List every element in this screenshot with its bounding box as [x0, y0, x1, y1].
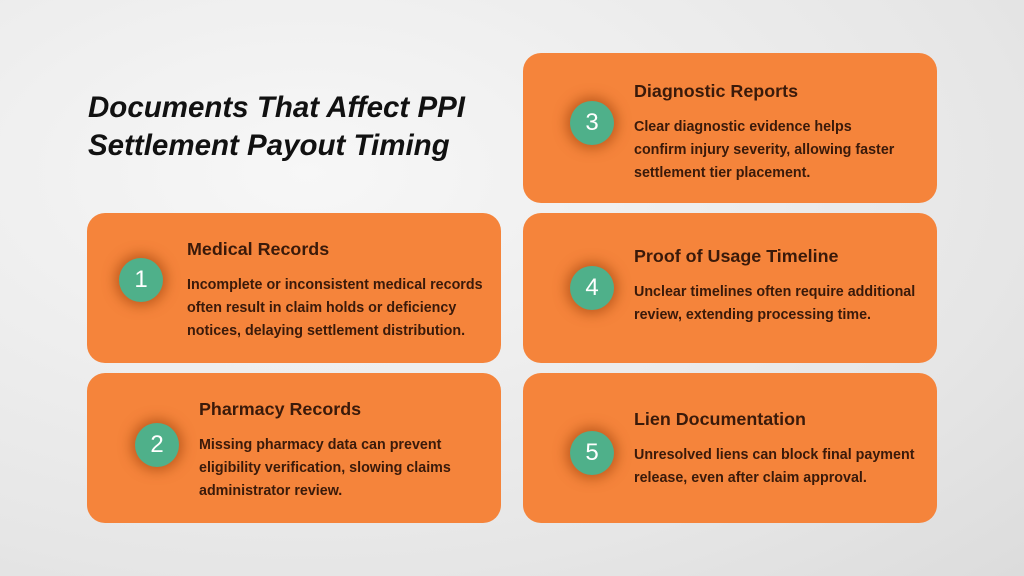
body text: often result in claim holds or deficiency [187, 300, 456, 316]
body text: Clear diagnostic evidence helps [634, 119, 852, 135]
card 3: diagnostic reports [523, 53, 937, 203]
body text: administrator review. [199, 483, 342, 499]
body text [634, 447, 914, 486]
body text: eligibility verification, slowing claims [199, 460, 451, 476]
body text: review, extending processing time. [634, 307, 871, 323]
icon: number 1 [119, 258, 163, 302]
title: Documents That Affect PPI [88, 91, 465, 124]
body text: confirm injury severity, allowing faster [634, 142, 894, 158]
heading: Medical Records [187, 239, 329, 259]
icon: number 1: 1 [134, 266, 148, 293]
body text: Incomplete or inconsistent medical records [187, 277, 483, 293]
icon: number 5 [570, 431, 614, 475]
body text [187, 277, 483, 339]
card 4: proof of usage timeline [523, 213, 937, 363]
body text: release, even after claim approval. [634, 470, 867, 486]
body text [634, 284, 915, 323]
icon: number 4: 4 [585, 274, 599, 301]
icon: number 2: 2 [150, 431, 164, 458]
card 2: pharmacy records [87, 373, 501, 523]
body text: settlement tier placement. [634, 165, 810, 181]
heading: Diagnostic Reports [634, 81, 798, 101]
card 5: lien documentation [523, 373, 937, 523]
icon: number 5: 5 [585, 439, 599, 466]
heading: Lien Documentation [634, 409, 806, 429]
icon: number 2 [135, 423, 179, 467]
heading: Pharmacy Records [199, 399, 361, 419]
card 1: medical records [87, 213, 501, 363]
body text: Unclear timelines often require additional [634, 284, 915, 300]
body text: notices, delaying settlement distribution. [187, 323, 465, 339]
body text [634, 119, 894, 181]
title: Settlement Payout Timing [88, 129, 450, 162]
icon: number 4 [570, 266, 614, 310]
body text: Unresolved liens can block final payment [634, 447, 914, 463]
body text [199, 437, 451, 499]
body text: Missing pharmacy data can prevent [199, 437, 441, 453]
icon: number 3 [570, 101, 614, 145]
heading: Proof of Usage Timeline [634, 246, 838, 266]
icon: number 3: 3 [585, 109, 599, 136]
title [88, 91, 466, 162]
